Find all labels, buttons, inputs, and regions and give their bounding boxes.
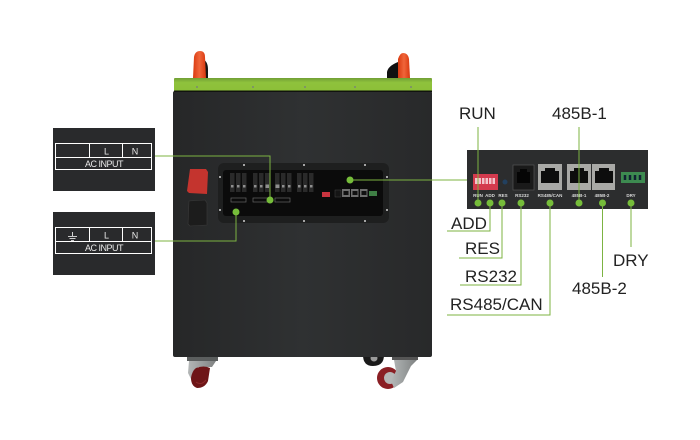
AC input panel 1: AC INPUT (85, 159, 124, 169)
black switch cover (188, 200, 207, 226)
callout labels: 485B-2 (572, 279, 627, 298)
red breaker cover (187, 169, 208, 194)
port labels: RUN (473, 193, 483, 198)
AC input panel 1: L (104, 146, 109, 156)
callout labels: RES (465, 239, 500, 258)
DRY connector (621, 172, 645, 183)
RS232 port (513, 165, 534, 190)
callout labels: RS485/CAN (450, 295, 543, 314)
AC input panel 2 (53, 212, 155, 275)
callout labels (450, 104, 649, 314)
callout dots (232, 176, 634, 216)
detail panel: communication ports (467, 150, 648, 209)
cabinet body (173, 78, 432, 357)
port labels: 485B-1 (572, 193, 587, 198)
callout labels: RS232 (465, 267, 517, 286)
callout labels: ADD (451, 214, 487, 233)
green top cover (174, 78, 432, 92)
small ports (322, 189, 377, 197)
port labels (473, 193, 636, 198)
terminal labels (231, 198, 290, 202)
RJ45 ports (538, 164, 615, 190)
port labels: 485B-2 (595, 193, 610, 198)
AC input panel 2: N (132, 230, 138, 240)
callout labels: RUN (459, 104, 496, 123)
callout lines (155, 127, 631, 315)
terminal blocks (230, 173, 314, 192)
left caster (187, 357, 218, 388)
cabinet handles (193, 51, 410, 78)
port labels: RS485/CAN (538, 193, 562, 198)
rear caster (363, 354, 384, 366)
AC input panel 2: L (104, 230, 109, 240)
right caster (377, 357, 418, 389)
DIP switch (473, 174, 498, 190)
interface panel on cabinet (218, 163, 389, 223)
AC input panel 1: N (132, 146, 138, 156)
icon: ground symbol (68, 232, 77, 240)
port labels: DRY (626, 193, 636, 198)
port labels: RS232 (515, 193, 529, 198)
AC input panel 2: AC INPUT (85, 243, 124, 253)
port labels: ADD (485, 193, 496, 198)
port labels: RES (498, 193, 508, 198)
callout labels: 485B-1 (552, 104, 607, 123)
reset button (502, 180, 508, 184)
AC input panel 1 (53, 128, 155, 191)
callout labels: DRY (613, 251, 649, 270)
